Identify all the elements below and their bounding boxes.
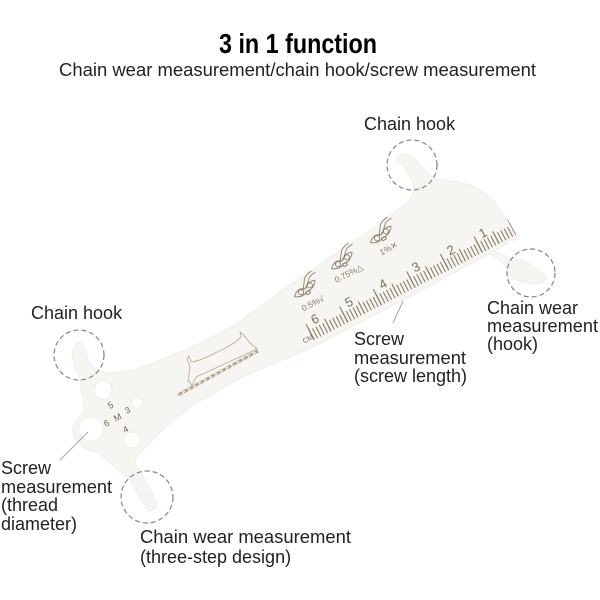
ruler numbers: [302, 225, 490, 345]
ruler numbers: 1: [476, 225, 490, 241]
thread size labels: 4: [121, 424, 130, 435]
label: thread diameter: diameter): [1, 514, 77, 534]
title: 3 in 1 function: [219, 28, 377, 59]
label: hook wear: measurement: [487, 316, 598, 336]
label: three-step design: (three-step design): [140, 547, 291, 567]
arrow: screw length: [393, 301, 403, 323]
ruler numbers: 3: [409, 259, 423, 275]
tool body: [72, 154, 546, 511]
label: three-step design: [140, 527, 351, 567]
chain engraving: [178, 332, 258, 395]
wear icons: 0.75%△: [333, 262, 365, 285]
ruler numbers: 6: [308, 311, 322, 327]
thread size labels: 6: [102, 418, 111, 429]
label: screw length: Screw: [354, 329, 405, 349]
ruler numbers: CM: [302, 334, 315, 345]
wear icons: 1%✕: [378, 239, 400, 257]
ruler ticks: [310, 227, 513, 335]
label: screw length: measurement: [354, 348, 466, 368]
label: hook wear: [487, 298, 598, 354]
label: three-step design: Chain wear measurement: [140, 527, 351, 547]
label: hook wear: (hook): [487, 334, 538, 354]
thread size labels: 3: [123, 405, 132, 416]
label: screw length: [354, 329, 467, 386]
callout circle: right hook: [507, 249, 555, 297]
wear icons: [287, 216, 400, 313]
callout circle: bottom step: [121, 471, 173, 523]
ruler numbers: 5: [342, 294, 356, 310]
callout circle: top chain hook: [387, 140, 437, 190]
thread size labels: [102, 400, 132, 435]
ruler numbers: 2: [444, 242, 458, 258]
tool: chain gauge: [72, 154, 546, 511]
label: thread diameter: (thread: [1, 495, 58, 515]
label: hook wear: Chain wear: [487, 298, 578, 318]
label: thread diameter: measurement: [1, 477, 112, 497]
label: left chain hook: Chain hook: [31, 303, 123, 323]
label: thread diameter: Screw: [1, 458, 52, 478]
wear icons: 0.5%√: [300, 293, 326, 313]
callout circle: left chain hook: [54, 330, 104, 380]
thread size labels: M: [112, 411, 123, 424]
label: screw length: (screw length): [354, 366, 467, 386]
ruler numbers: 4: [376, 276, 390, 292]
label: top chain hook: Chain hook: [364, 114, 456, 134]
label: thread diameter: [1, 458, 112, 534]
arrow: thread diameter: [60, 432, 88, 460]
thread size labels: 5: [106, 400, 115, 411]
subtitle: Chain wear measurement/chain hook/screw measurement: [59, 60, 536, 80]
